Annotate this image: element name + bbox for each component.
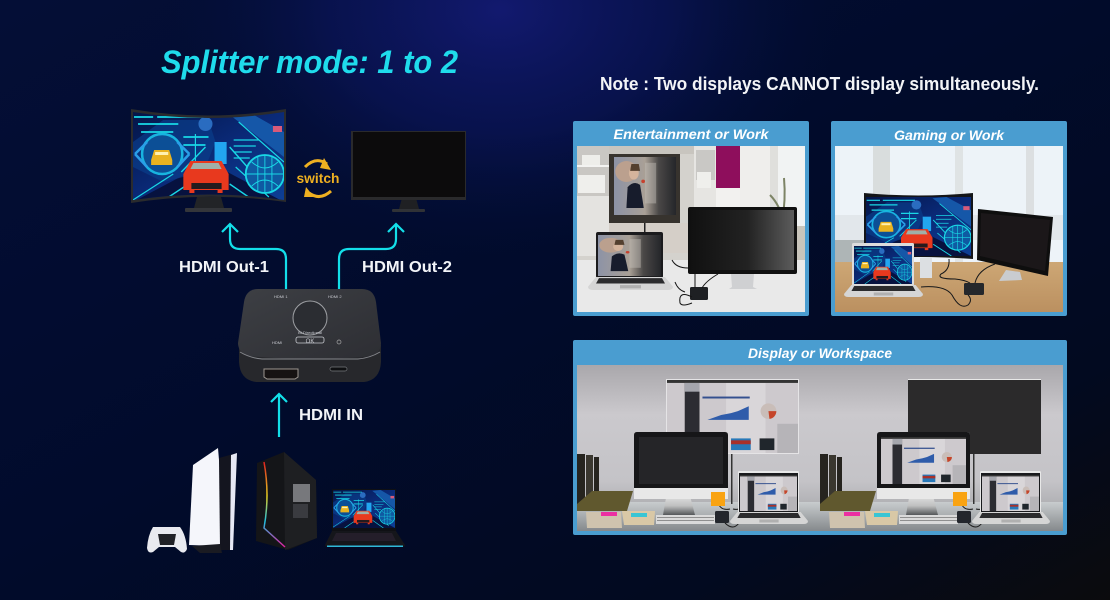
arrow: to HDMI Out-2: [339, 224, 404, 291]
icon: switch arrows: switch: [296, 170, 340, 186]
photo: wall display on, monitor off: [577, 365, 820, 531]
device: HDMI splitter: HDMI 2: [328, 294, 342, 299]
icon: PC tower: [256, 452, 317, 550]
arrow: to HDMI Out-1: [222, 224, 286, 291]
device: HDMI splitter: [238, 289, 381, 382]
device: HDMI splitter: HDMI: [272, 340, 282, 345]
panel: Display or Workspace: [573, 340, 1067, 535]
arrow: HDMI IN: [271, 394, 287, 437]
icon: switch arrows: [296, 158, 340, 197]
heading: Entertainment or Work: Entertainment or Work: [614, 126, 770, 142]
label: HDMI Out-1: HDMI Out-1: [179, 259, 269, 276]
panel: Gaming or Work: [831, 121, 1067, 316]
label: HDMI IN: HDMI IN: [299, 407, 363, 424]
panel: Entertainment or Work: [573, 121, 809, 316]
device: HDMI splitter: OK: [306, 339, 314, 345]
heading: Display or Workspace: Display or Workspace: [748, 345, 892, 361]
device: HDMI splitter: Bi-Directional: [298, 330, 322, 335]
photo: living room setup: [577, 146, 805, 312]
heading: Gaming or Work: Gaming or Work: [894, 127, 1005, 143]
note: Note : Two displays CANNOT display simultaneously.: [600, 74, 1039, 94]
monitor: HDMI Out-1 curved display: [131, 109, 286, 212]
title: Splitter mode: 1 to 2: [161, 44, 458, 80]
photo: desk setup: [835, 146, 1063, 312]
icon: gaming laptop: [325, 489, 405, 547]
photo: wall display off, monitor on: [820, 365, 1063, 531]
device: HDMI splitter: PX: [305, 301, 316, 310]
device: HDMI splitter: HDMI 1: [274, 294, 288, 299]
monitor: HDMI Out-2 blank display: [351, 131, 466, 212]
icon: game console and controller: [147, 448, 237, 553]
label: HDMI Out-2: HDMI Out-2: [362, 259, 452, 276]
